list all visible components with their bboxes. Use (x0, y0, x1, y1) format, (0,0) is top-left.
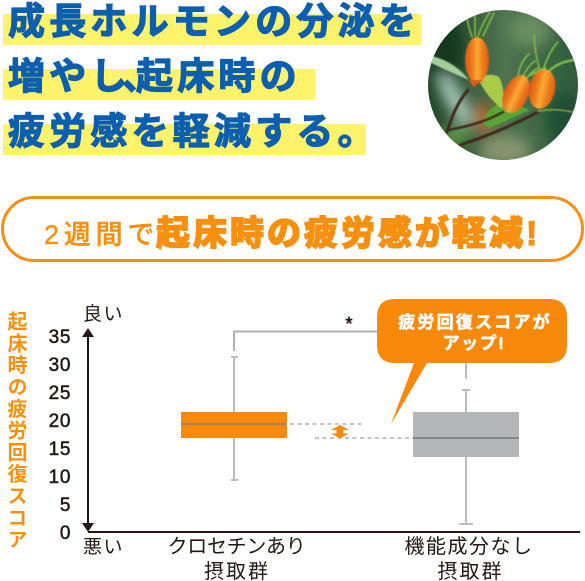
lower leaf (482, 101, 530, 128)
dashed reference lines (290, 424, 413, 438)
heading text line 2: 、 (122, 56, 163, 97)
whisker: crocetin group (231, 357, 238, 480)
heading text line 1: 成長ホルモンの分泌を (8, 1, 420, 42)
box plot chart (4, 299, 580, 581)
difference arrow (331, 425, 349, 438)
y-axis title: 起床時の疲労回復スコア (4, 311, 27, 551)
y-axis tick labels: 10 (49, 467, 71, 488)
heading highlight bars (3, 14, 421, 155)
heading text line 3: 疲労感を軽減する。 (8, 111, 379, 152)
y-axis tick labels: 20 (49, 411, 71, 432)
median: crocetin group (181, 423, 287, 425)
box: placebo group (413, 412, 519, 457)
heading text line 2: 起床時の (136, 56, 301, 97)
y-axis tick labels: 25 (49, 383, 71, 404)
speech bubble text line 1: 疲労回復スコアが (398, 312, 552, 332)
median: placebo group (413, 437, 519, 439)
y-axis double arrow (82, 328, 94, 532)
upper leaf (478, 75, 503, 109)
speech bubble (377, 299, 567, 424)
group label: placebo: 機能成分なし (404, 535, 534, 558)
left leaf (431, 56, 469, 80)
pill text: 起床時の疲労感が軽減! (156, 214, 540, 253)
buds (465, 37, 489, 83)
whisker: placebo group (459, 363, 473, 524)
y-axis tick labels (49, 327, 71, 544)
group label: crocetin: クロセチンあり (168, 535, 305, 558)
branches (447, 90, 573, 145)
y-axis bottom label: 悪い (83, 537, 124, 558)
significance bracket (234, 332, 380, 351)
y-axis tick labels: 35 (49, 327, 71, 348)
x-axis line (88, 531, 580, 533)
speech bubble text line 2: アップ! (443, 334, 505, 353)
y-axis tick labels: 30 (49, 355, 71, 376)
heading text line 2: 増やし (8, 56, 132, 97)
sepals (467, 12, 574, 78)
y-axis tick labels: 15 (49, 439, 71, 460)
photo: orange buds on a branch (428, 10, 578, 160)
y-axis tick labels: 0 (60, 523, 71, 544)
callout pill (2, 198, 582, 260)
y-axis top label: 良い (83, 303, 124, 325)
box: crocetin group (181, 412, 287, 438)
heading (3, 1, 421, 155)
y-axis tick labels: 5 (60, 495, 71, 516)
pill text: 2週間で (44, 220, 159, 250)
significance star: * (345, 314, 353, 334)
